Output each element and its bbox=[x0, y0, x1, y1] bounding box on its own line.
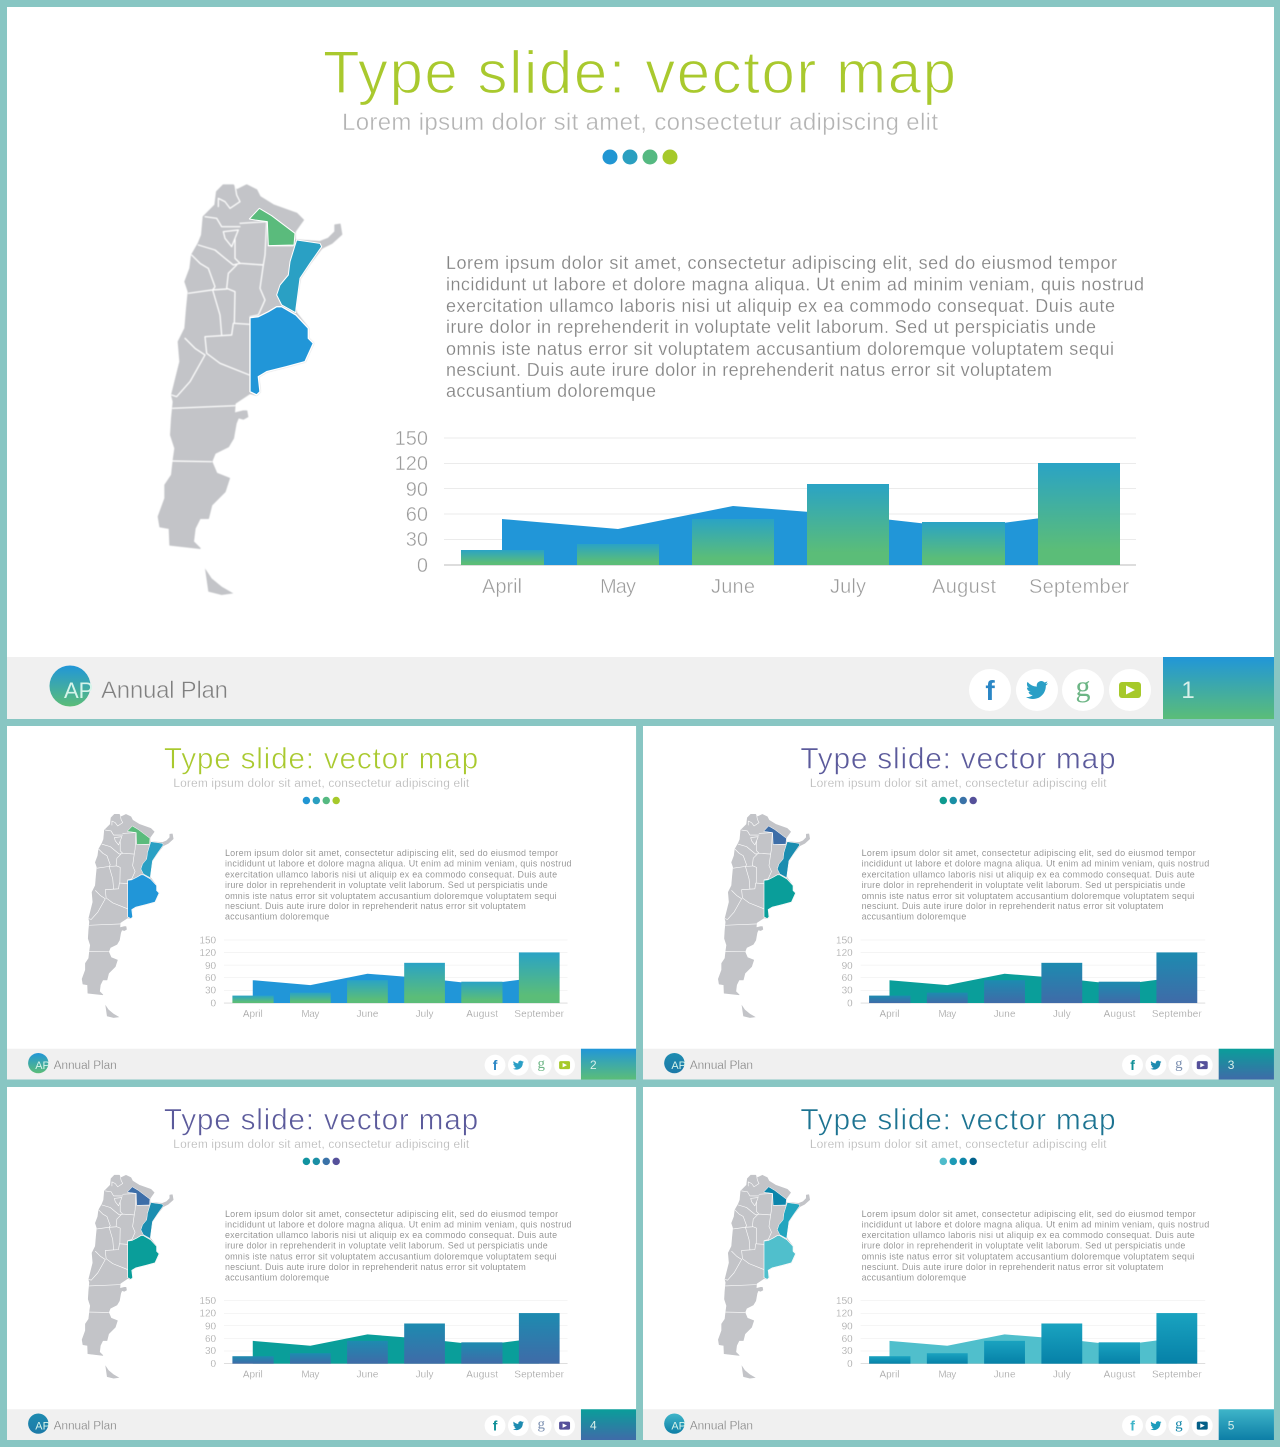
page number block: 5 bbox=[1228, 1419, 1235, 1433]
body text: accusantium doloremque bbox=[225, 912, 329, 922]
body text: Lorem ipsum dolor sit amet, consectetur adipiscing elit, sed do eiusmod tempor bbox=[225, 1209, 558, 1219]
title: Type slide: vector map bbox=[800, 743, 1116, 776]
area series bbox=[890, 1334, 1177, 1364]
page number block: 2 bbox=[590, 1058, 597, 1072]
body text: accusantium doloremque bbox=[862, 1272, 966, 1282]
logo bbox=[664, 1413, 686, 1434]
month labels: April bbox=[243, 1370, 263, 1381]
body text: irure dolor in reprehenderit in voluptate velit laborum. Sed ut perspiciatis unde bbox=[446, 317, 1096, 337]
subtitle: Lorem ipsum dolor sit amet, consectetur adipiscing elit bbox=[810, 776, 1107, 790]
bar series bbox=[232, 1313, 560, 1364]
body text: irure dolor in reprehenderit in voluptate velit laborum. Sed ut perspiciatis unde bbox=[862, 880, 1185, 890]
chart bbox=[836, 1296, 1205, 1381]
body text: exercitation ullamco laboris nisi ut aliquip ex ea commodo consequat. Duis aute bbox=[446, 296, 1115, 316]
logo: AP bbox=[35, 1060, 50, 1072]
month labels: September bbox=[514, 1370, 565, 1381]
body text: accusantium doloremque bbox=[225, 1272, 329, 1282]
chart bbox=[199, 1296, 568, 1381]
axis labels: 120 bbox=[395, 453, 428, 475]
axis labels: 30 bbox=[842, 986, 853, 997]
icons: social: g bbox=[1076, 670, 1090, 703]
axis labels: 0 bbox=[847, 1359, 853, 1370]
axis labels bbox=[199, 935, 216, 1010]
brand name: Annual Plan bbox=[690, 1058, 753, 1072]
area series bbox=[890, 974, 1177, 1003]
month labels: September bbox=[1152, 1370, 1202, 1381]
axis labels: 150 bbox=[836, 1296, 853, 1307]
title: Type slide: vector map bbox=[323, 39, 956, 106]
axis labels: 90 bbox=[205, 961, 216, 972]
axis labels bbox=[836, 935, 853, 1010]
body text: omnis iste natus error sit voluptatem accusantium doloremque voluptatem sequi bbox=[862, 1252, 1194, 1262]
month labels: August bbox=[466, 1009, 498, 1020]
body text: incididunt ut labore et dolore magna aliqua. Ut enim ad minim veniam, quis nostrud bbox=[446, 274, 1144, 294]
axis labels: 150 bbox=[836, 935, 853, 946]
month labels: May bbox=[938, 1009, 956, 1020]
footer bbox=[7, 657, 1274, 719]
body text bbox=[446, 253, 1144, 401]
page number block: 1 bbox=[1181, 677, 1195, 704]
icons: social: f bbox=[493, 1057, 498, 1073]
month labels: June bbox=[357, 1370, 379, 1381]
dots bbox=[303, 1158, 340, 1165]
axis labels bbox=[836, 1296, 853, 1370]
map of Argentina bbox=[158, 185, 342, 595]
page number block bbox=[1163, 657, 1274, 719]
month labels bbox=[243, 1370, 565, 1381]
body text: nesciunt. Duis aute irure dolor in reprehenderit natus error sit voluptatem bbox=[862, 1262, 1163, 1272]
axis labels: 30 bbox=[205, 1346, 217, 1357]
month labels: June bbox=[994, 1009, 1016, 1020]
body text bbox=[862, 848, 1209, 922]
page number block: 4 bbox=[590, 1419, 597, 1433]
dots bbox=[940, 797, 977, 804]
icons: social bbox=[1122, 1415, 1213, 1436]
axis labels: 90 bbox=[842, 1321, 853, 1332]
month labels: August bbox=[1104, 1370, 1136, 1381]
body text: Lorem ipsum dolor sit amet, consectetur adipiscing elit, sed do eiusmod tempor bbox=[862, 1209, 1196, 1219]
map of Argentina bbox=[718, 1175, 810, 1379]
page number block bbox=[1219, 1409, 1274, 1440]
body text: Lorem ipsum dolor sit amet, consectetur adipiscing elit, sed do eiusmod tempor bbox=[225, 848, 558, 858]
month labels bbox=[880, 1009, 1202, 1020]
subtitle: Lorem ipsum dolor sit amet, consectetur adipiscing elit bbox=[173, 1137, 470, 1151]
body text: omnis iste natus error sit voluptatem accusantium doloremque voluptatem sequi bbox=[446, 339, 1114, 359]
brand name: Annual Plan bbox=[54, 1058, 117, 1072]
body text: irure dolor in reprehenderit in voluptate velit laborum. Sed ut perspiciatis unde bbox=[225, 1241, 548, 1251]
month labels: May bbox=[938, 1370, 956, 1381]
body text: incididunt ut labore et dolore magna aliqua. Ut enim ad minim veniam, quis nostrud bbox=[862, 859, 1209, 869]
bar series bbox=[461, 463, 1120, 565]
body text: irure dolor in reprehenderit in voluptate velit laborum. Sed ut perspiciatis unde bbox=[225, 880, 548, 890]
subtitle: Lorem ipsum dolor sit amet, consectetur adipiscing elit bbox=[342, 109, 938, 136]
month labels: June bbox=[994, 1370, 1016, 1381]
body text: accusantium doloremque bbox=[862, 912, 966, 922]
area series bbox=[253, 974, 539, 1003]
month labels: April bbox=[243, 1009, 263, 1020]
axis labels: 120 bbox=[199, 1309, 217, 1320]
body text: exercitation ullamco laboris nisi ut aliquip ex ea commodo consequat. Duis aute bbox=[225, 1230, 557, 1240]
map of Argentina bbox=[82, 814, 173, 1018]
axis labels: 0 bbox=[417, 555, 428, 577]
subtitle: Lorem ipsum dolor sit amet, consectetur adipiscing elit bbox=[173, 776, 470, 790]
month labels: August bbox=[932, 576, 996, 598]
body text: accusantium doloremque bbox=[446, 381, 656, 401]
bar series bbox=[869, 1313, 1197, 1364]
icons: social bbox=[1122, 1055, 1213, 1076]
month labels: August bbox=[466, 1370, 498, 1381]
body text: incididunt ut labore et dolore magna aliqua. Ut enim ad minim veniam, quis nostrud bbox=[225, 859, 572, 869]
slide 3 bbox=[643, 726, 1274, 1080]
logo bbox=[50, 666, 93, 706]
month labels: June bbox=[711, 576, 755, 598]
brand name: Annual Plan bbox=[54, 1419, 117, 1433]
body text: incididunt ut labore et dolore magna aliqua. Ut enim ad minim veniam, quis nostrud bbox=[862, 1220, 1209, 1230]
axis labels: 120 bbox=[199, 948, 216, 959]
icons: social: g bbox=[538, 1056, 546, 1072]
page number block bbox=[581, 1049, 636, 1080]
footer bbox=[643, 1049, 1274, 1080]
axis labels: 0 bbox=[211, 1359, 217, 1370]
month labels: July bbox=[1053, 1370, 1071, 1381]
body text: nesciunt. Duis aute irure dolor in reprehenderit natus error sit voluptatem bbox=[225, 1262, 526, 1272]
chart bbox=[395, 428, 1136, 598]
title: Type slide: vector map bbox=[164, 743, 478, 776]
body text: nesciunt. Duis aute irure dolor in reprehenderit natus error sit voluptatem bbox=[446, 360, 1052, 380]
month labels: September bbox=[1029, 576, 1129, 598]
month labels: July bbox=[416, 1009, 434, 1020]
axis labels: 0 bbox=[210, 999, 216, 1010]
bar series bbox=[869, 952, 1197, 1003]
slide 1: main slide bbox=[7, 7, 1274, 719]
body text: omnis iste natus error sit voluptatem accusantium doloremque voluptatem sequi bbox=[225, 891, 557, 901]
icons: social: g bbox=[538, 1417, 546, 1433]
area series bbox=[253, 1334, 539, 1364]
month labels bbox=[243, 1009, 565, 1020]
icons: social bbox=[485, 1055, 575, 1076]
axis labels: 90 bbox=[205, 1321, 217, 1332]
map of Argentina bbox=[82, 1175, 173, 1379]
area series bbox=[502, 506, 1079, 565]
bar series bbox=[232, 952, 560, 1003]
body text: exercitation ullamco laboris nisi ut aliquip ex ea commodo consequat. Duis aute bbox=[225, 869, 557, 879]
brand name: Annual Plan bbox=[690, 1419, 753, 1433]
axis labels: 150 bbox=[199, 1296, 217, 1307]
body text: exercitation ullamco laboris nisi ut aliquip ex ea commodo consequat. Duis aute bbox=[862, 1230, 1195, 1240]
footer bbox=[7, 1049, 636, 1080]
icons: social bbox=[485, 1415, 575, 1436]
body text: incididunt ut labore et dolore magna aliqua. Ut enim ad minim veniam, quis nostrud bbox=[225, 1220, 572, 1230]
body text: nesciunt. Duis aute irure dolor in reprehenderit natus error sit voluptatem bbox=[225, 901, 526, 911]
logo: AP bbox=[671, 1421, 686, 1433]
icons: social: f bbox=[1130, 1057, 1135, 1073]
body text: exercitation ullamco laboris nisi ut aliquip ex ea commodo consequat. Duis aute bbox=[862, 869, 1195, 879]
icons: social: g bbox=[1175, 1417, 1183, 1433]
month labels: July bbox=[416, 1370, 434, 1381]
logo bbox=[664, 1053, 686, 1073]
axis labels: 60 bbox=[842, 1334, 853, 1345]
month labels: April bbox=[482, 576, 522, 598]
body text: Lorem ipsum dolor sit amet, consectetur adipiscing elit, sed do eiusmod tempor bbox=[862, 848, 1196, 858]
chart bbox=[836, 935, 1205, 1020]
logo: AP bbox=[35, 1421, 50, 1433]
axis labels: 120 bbox=[836, 1309, 853, 1320]
body text bbox=[225, 1209, 572, 1282]
month labels: May bbox=[600, 576, 636, 598]
month labels: May bbox=[301, 1370, 319, 1381]
chart bbox=[199, 935, 568, 1020]
icons: social bbox=[969, 669, 1151, 711]
page number block bbox=[1219, 1049, 1274, 1080]
month labels: April bbox=[880, 1370, 899, 1381]
body text bbox=[225, 848, 572, 922]
logo: AP bbox=[64, 678, 93, 703]
body text: nesciunt. Duis aute irure dolor in reprehenderit natus error sit voluptatem bbox=[862, 901, 1163, 911]
axis labels: 60 bbox=[406, 504, 428, 526]
icons: social: f bbox=[1130, 1418, 1135, 1434]
axis labels: 0 bbox=[847, 999, 853, 1010]
footer bbox=[643, 1409, 1274, 1440]
map of Argentina bbox=[718, 814, 810, 1018]
month labels: April bbox=[880, 1009, 899, 1020]
month labels: August bbox=[1104, 1009, 1136, 1020]
icons: social: g bbox=[1175, 1056, 1183, 1072]
body text: omnis iste natus error sit voluptatem accusantium doloremque voluptatem sequi bbox=[225, 1252, 557, 1262]
month labels: September bbox=[1152, 1009, 1202, 1020]
axis labels: 60 bbox=[205, 1334, 217, 1345]
brand name: Annual Plan bbox=[101, 677, 228, 704]
page number block: 3 bbox=[1228, 1058, 1235, 1072]
axis labels: 60 bbox=[205, 973, 216, 984]
month labels: May bbox=[301, 1009, 319, 1020]
axis labels: 150 bbox=[199, 935, 216, 946]
logo bbox=[28, 1053, 50, 1073]
icons: social: f bbox=[493, 1418, 498, 1434]
axis labels bbox=[395, 428, 428, 577]
icons: social: f bbox=[985, 675, 995, 706]
body text: Lorem ipsum dolor sit amet, consectetur adipiscing elit, sed do eiusmod tempor bbox=[446, 253, 1117, 273]
logo bbox=[28, 1413, 50, 1434]
page number block bbox=[581, 1409, 636, 1440]
axis labels bbox=[199, 1296, 217, 1370]
dots bbox=[940, 1158, 977, 1165]
axis labels: 90 bbox=[406, 479, 428, 501]
month labels: June bbox=[357, 1009, 379, 1020]
month labels: July bbox=[1053, 1009, 1071, 1020]
dots bbox=[602, 150, 678, 164]
body text bbox=[862, 1209, 1209, 1282]
dots bbox=[303, 797, 340, 804]
axis labels: 120 bbox=[836, 948, 853, 959]
title: Type slide: vector map bbox=[164, 1104, 478, 1137]
title: Type slide: vector map bbox=[800, 1104, 1116, 1137]
month labels: September bbox=[514, 1009, 565, 1020]
axis labels: 30 bbox=[406, 529, 428, 551]
axis labels: 90 bbox=[842, 961, 853, 972]
month labels bbox=[482, 576, 1129, 598]
slide 2 bbox=[7, 726, 636, 1080]
axis labels: 30 bbox=[842, 1346, 853, 1357]
subtitle: Lorem ipsum dolor sit amet, consectetur adipiscing elit bbox=[810, 1137, 1107, 1151]
body text: irure dolor in reprehenderit in voluptate velit laborum. Sed ut perspiciatis unde bbox=[862, 1241, 1185, 1251]
body text: omnis iste natus error sit voluptatem accusantium doloremque voluptatem sequi bbox=[862, 891, 1194, 901]
axis labels: 30 bbox=[205, 986, 216, 997]
slide 5 bbox=[643, 1087, 1274, 1440]
month labels bbox=[880, 1370, 1202, 1381]
month labels: July bbox=[830, 576, 866, 598]
axis labels: 150 bbox=[395, 428, 428, 450]
logo: AP bbox=[671, 1060, 686, 1072]
axis labels: 60 bbox=[842, 973, 853, 984]
slide 4 bbox=[7, 1087, 636, 1440]
footer bbox=[7, 1409, 636, 1440]
